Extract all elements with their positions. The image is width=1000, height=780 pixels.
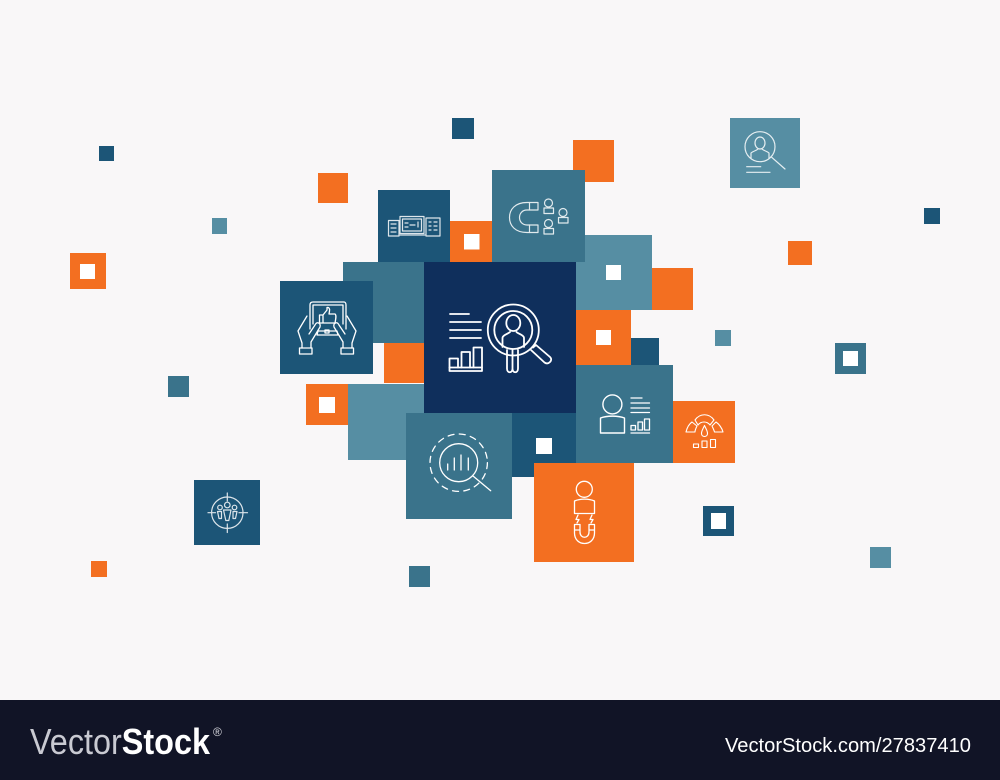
icon: gauge dial with drop and bars — [686, 415, 723, 448]
panel: magnet attracting people — [492, 170, 585, 262]
logo wordmark: VectorStock — [30, 721, 211, 762]
panel: orange block right — [652, 268, 693, 310]
icon: magnifier on person with lines — [745, 132, 785, 172]
image id: VectorStock.com/27837410 — [725, 735, 971, 757]
panel: orange block with white square top — [450, 221, 492, 262]
panel: devices — [378, 190, 450, 262]
panel: person and magnet — [534, 463, 634, 562]
panel: light teal block left — [348, 384, 424, 460]
orange framed square, left — [70, 253, 106, 289]
icon: crosshair around group — [208, 493, 248, 532]
panel: orange block with white square left — [306, 384, 348, 425]
scattered decorative squares — [91, 118, 940, 587]
icon: person above magnet — [574, 481, 594, 544]
panel: orange block under teal — [384, 343, 424, 383]
icon: phone, monitor and tablet — [388, 216, 440, 236]
icon: magnifier over bars with dashed ring — [430, 434, 491, 491]
registered mark: ® — [213, 725, 222, 739]
panel: light teal block right — [576, 235, 652, 310]
panel: magnifier with chart — [406, 413, 512, 519]
panel: central analysis — [424, 262, 576, 413]
footer bar — [0, 700, 1000, 780]
icon: person bust — [600, 395, 624, 433]
panel: gauge — [673, 401, 735, 463]
panel: teal block behind like icon — [343, 262, 424, 343]
teal framed square, right — [835, 343, 866, 374]
icon: lines and bars — [631, 398, 650, 433]
panel: orange block with white square right — [576, 310, 631, 365]
icon: magnifier with person — [488, 304, 551, 372]
panel: dark teal small block — [631, 338, 659, 365]
icon: horseshoe magnet — [510, 202, 538, 232]
icon: three people — [544, 199, 568, 234]
dark teal framed square, lower right — [703, 506, 734, 536]
icon: tablet with thumbs up — [298, 302, 356, 354]
panel: target audience, lower left — [194, 480, 260, 545]
panel: hands holding tablet — [280, 281, 373, 374]
panel: dark teal block with white square — [512, 413, 576, 477]
panel: profile search, top right — [730, 118, 800, 188]
panel: person with report — [576, 365, 673, 463]
icon: text lines and bar chart — [450, 314, 482, 371]
white square on light teal block — [606, 265, 621, 280]
